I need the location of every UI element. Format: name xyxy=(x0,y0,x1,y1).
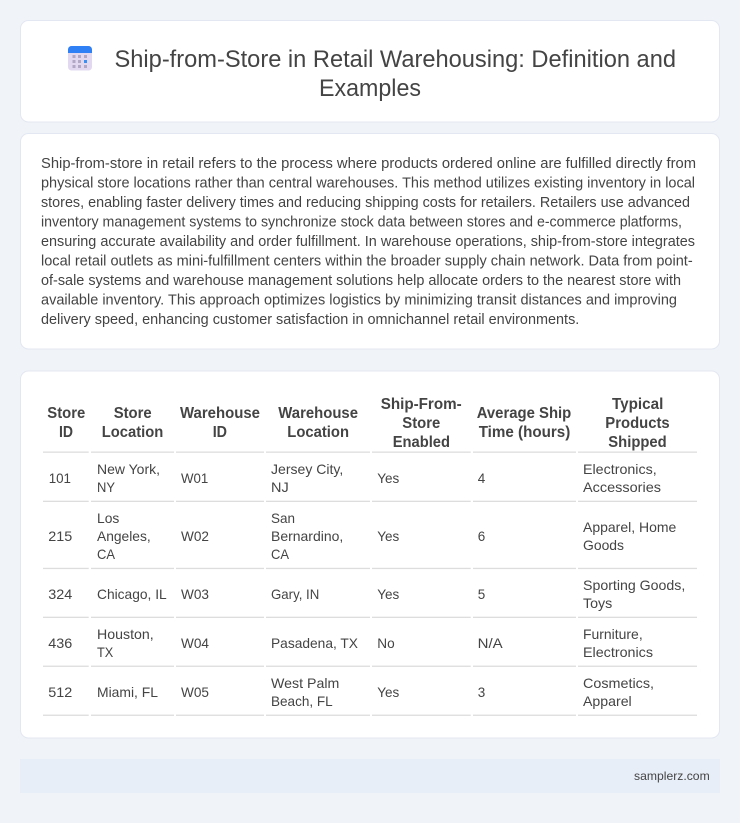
table row: store 324: Toys xyxy=(583,595,612,611)
text block: description paragraph: ensuring accurate availability and order fulfillment. In warehouse operations, ship-from-store integrates xyxy=(41,234,695,250)
table row: store 324: 324 xyxy=(48,586,73,602)
icon: calendar xyxy=(68,46,92,70)
table row: store 215: CA xyxy=(271,546,290,562)
table header row: Shipped xyxy=(608,434,667,451)
table row: store 436: Furniture, xyxy=(583,626,643,642)
table header row: Ship-From- xyxy=(381,396,462,413)
title: Ship-from-Store in Retail Warehousing: Definition and xyxy=(114,46,676,73)
table row: store 436: Houston, xyxy=(97,626,154,642)
table row: store 101: Accessories xyxy=(583,479,661,495)
table header row: ID xyxy=(59,424,73,441)
table row: store 215 xyxy=(43,510,697,569)
table row: store 512: Yes xyxy=(377,684,399,700)
table header row: Store xyxy=(402,415,441,432)
text block: description paragraph: stores, enabling faster delivery times and reducing shipping costs for retailers. Retailers use advanced xyxy=(41,195,690,211)
table header row xyxy=(43,396,697,453)
table row: store 215: Los xyxy=(97,510,119,526)
table row: store 324: Gary, IN xyxy=(271,586,319,602)
table header row: Products xyxy=(605,415,670,432)
table row: store 215: Goods xyxy=(583,537,624,553)
table header row: Location xyxy=(287,424,349,441)
table header row: Warehouse xyxy=(180,405,260,422)
table row: store 101: New York, xyxy=(97,461,160,477)
table row: store 215: San xyxy=(271,510,295,526)
footer bar xyxy=(20,759,720,793)
text block: description paragraph: physical store locations rather than central warehouses. This method utilizes existing inventory in local xyxy=(41,176,695,192)
title: Examples xyxy=(319,75,421,102)
table row: store 436: W04 xyxy=(181,635,209,651)
text block: description paragraph: local retail outlets as mini-fulfillment centers within the broader supply chain network. Data from point- xyxy=(41,254,693,270)
table header row: ID xyxy=(213,424,227,441)
table header row: Store xyxy=(114,405,152,422)
table row: store 512 xyxy=(43,675,697,716)
table row: store 436: TX xyxy=(97,644,114,660)
table row: store 324: Sporting Goods, xyxy=(583,577,685,593)
table row: store 215: CA xyxy=(97,546,116,562)
table header row: Store xyxy=(47,405,86,422)
table row: store 512: W05 xyxy=(181,684,209,700)
text block: description paragraph: inventory management systems to synchronize stock data between stores and e-commerce platforms, xyxy=(41,214,682,230)
table row: store 512: West Palm xyxy=(271,675,339,691)
text block: description paragraph: available inventory. This approach optimizes logistics by minimizing transit distances and improving xyxy=(41,292,677,308)
panel: table card xyxy=(20,371,720,738)
text block: description paragraph: of-sale systems and warehouse management solutions help allocate orders to the nearest store with xyxy=(41,273,681,289)
table row: store 215: Bernardino, xyxy=(271,528,343,544)
table row: store 324: Yes xyxy=(377,586,399,602)
text block: description paragraph xyxy=(41,156,696,328)
table: store and warehouse data xyxy=(43,396,697,716)
text block: description paragraph: delivery speed, enhancing customer satisfaction in omnichannel retail environments. xyxy=(41,312,579,328)
table row: store 215: Apparel, Home xyxy=(583,519,677,535)
table row: store 215: 6 xyxy=(478,528,485,544)
table row: store 101: Jersey City, xyxy=(271,461,343,477)
table header row: Time (hours) xyxy=(479,424,570,441)
table row: store 101 xyxy=(43,461,697,502)
table header row: Average Ship xyxy=(477,405,571,422)
text block: description paragraph: Ship-from-store in retail refers to the process where products ordered online are fulfilled directly from xyxy=(41,156,696,172)
table header row: Enabled xyxy=(393,434,450,451)
table row: store 215: 215 xyxy=(48,528,73,544)
table row: store 215: W02 xyxy=(181,528,209,544)
table row: store 512: Apparel xyxy=(583,693,632,709)
table row: store 101: W01 xyxy=(181,470,208,486)
table row: store 101: Yes xyxy=(377,470,399,486)
table row: store 436 xyxy=(43,626,697,667)
panel: title header xyxy=(20,20,720,122)
table row: store 436: No xyxy=(377,635,395,651)
table header row: Location xyxy=(102,424,163,441)
table row: store 101: NY xyxy=(97,479,116,495)
table header row: Typical xyxy=(612,396,663,413)
footer source text: samplerz.com xyxy=(634,769,710,783)
table row: store 215: Angeles, xyxy=(97,528,151,544)
table row: store 324: Chicago, IL xyxy=(97,586,167,602)
table row: store 324 xyxy=(43,577,697,618)
table row: store 512: Miami, FL xyxy=(97,684,158,700)
table row: store 436: Pasadena, TX xyxy=(271,635,359,651)
table row: store 101: Electronics, xyxy=(583,461,657,477)
table row: store 512: Beach, FL xyxy=(271,693,333,709)
table header row: Warehouse xyxy=(278,405,358,422)
table row: store 101: NJ xyxy=(271,479,289,495)
table row: store 324: 5 xyxy=(478,586,485,602)
table row: store 324: W03 xyxy=(181,586,209,602)
table row: store 436: N/A xyxy=(478,635,503,651)
table row: store 436: 436 xyxy=(48,635,73,651)
table row: store 512: Cosmetics, xyxy=(583,675,654,691)
table row: store 512: 512 xyxy=(48,684,73,700)
table row: store 512: 3 xyxy=(478,684,485,700)
table row: store 215: Yes xyxy=(377,528,399,544)
table row: store 101: 4 xyxy=(478,470,485,486)
table row: store 101: 101 xyxy=(49,470,71,486)
table row: store 436: Electronics xyxy=(583,644,653,660)
title xyxy=(114,46,676,102)
panel: description xyxy=(20,134,720,349)
